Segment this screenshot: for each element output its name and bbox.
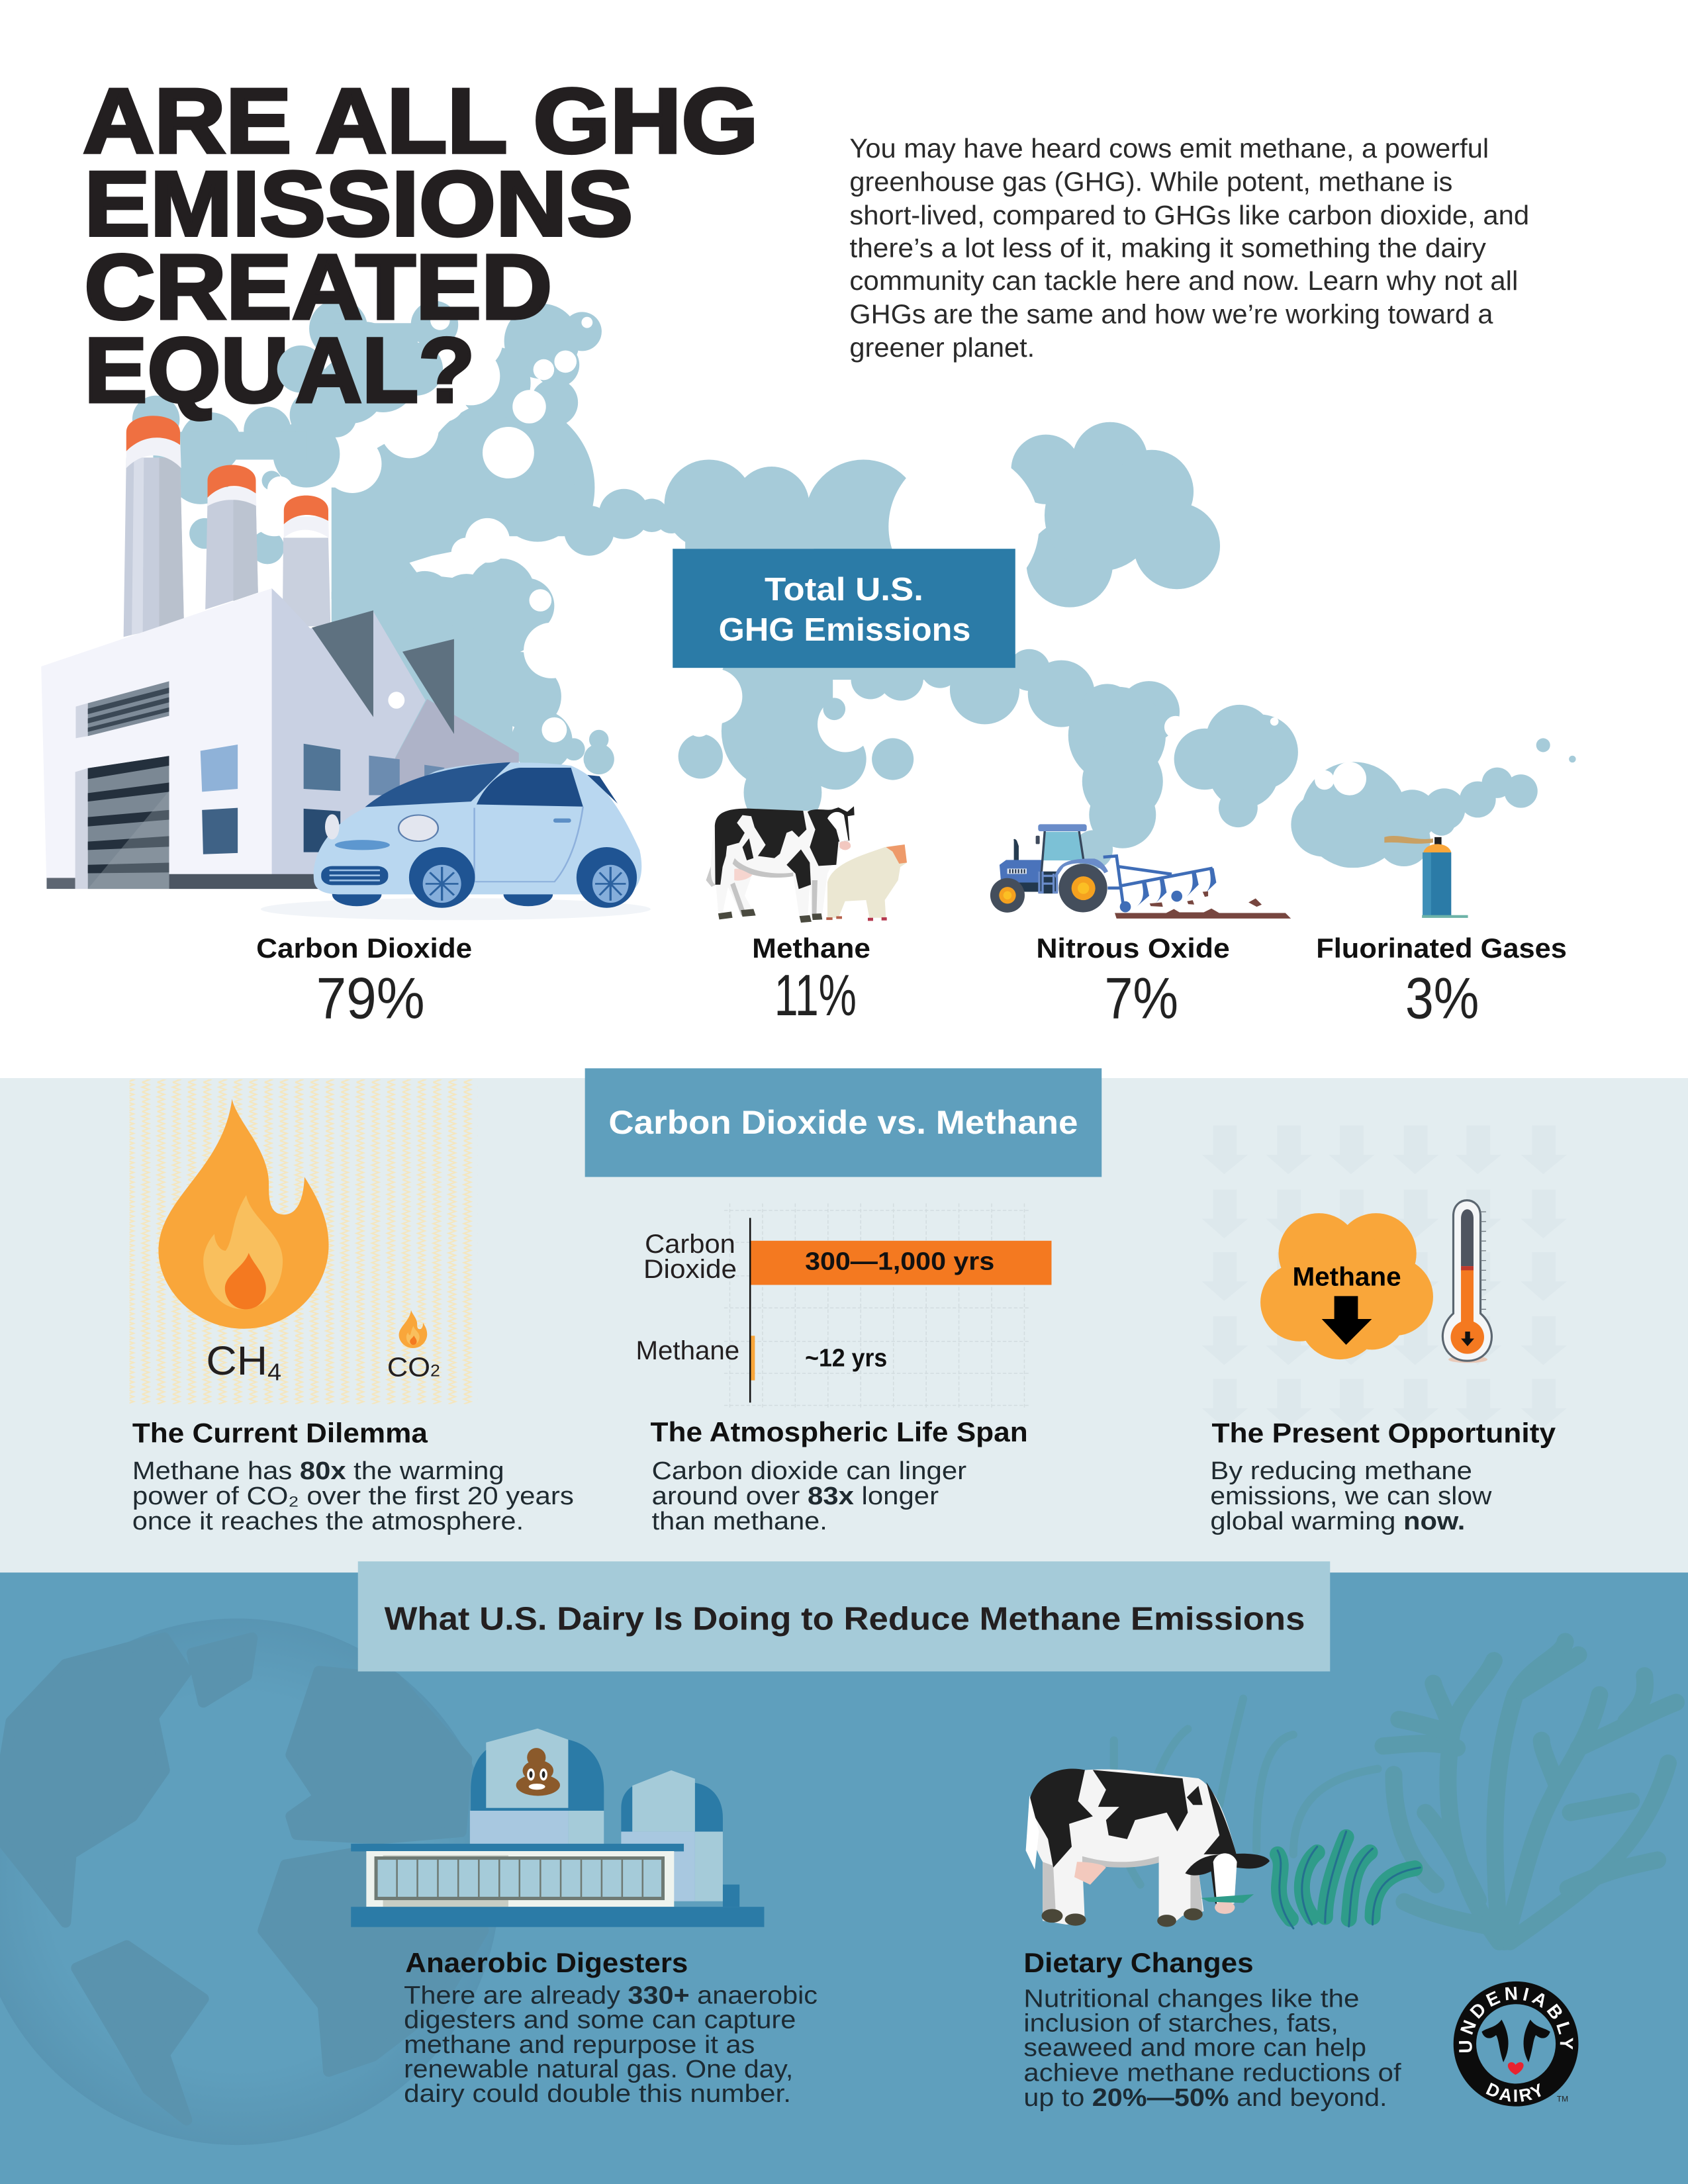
- intro paragraph: short-lived, compared to GHGs like carbon dioxide, and: [849, 200, 1529, 230]
- title: EQU: [84, 319, 289, 422]
- heading: what U.S. dairy is doing: [358, 1561, 1330, 1672]
- text block: anaerobic digesters: renewable natural gas. One day,: [404, 2056, 793, 2083]
- chart category labels: Carbon: [645, 1230, 735, 1259]
- icon: small flame: [399, 1310, 427, 1348]
- chart value labels: ~12 yrs: [805, 1345, 887, 1373]
- text block: the present opportunity: [1210, 1417, 1556, 1535]
- text block: atmospheric life span: [651, 1416, 1028, 1535]
- text block: the present opportunity: The Present Opportunity: [1211, 1417, 1556, 1448]
- barn building: [351, 1844, 764, 1927]
- cloud cut-outs: factory smoke: [323, 281, 592, 772]
- text block: dietary changes: [1023, 1947, 1401, 2112]
- intro paragraph: community can tackle here and now. Learn why not all: [849, 265, 1518, 296]
- bar chart: atmospheric life span: [635, 1203, 1051, 1410]
- text block: the current dilemma: The Current Dilemma: [132, 1417, 428, 1448]
- illustration: car: [261, 762, 651, 920]
- illustration: cow and sheep: [706, 806, 907, 923]
- factory windows: [201, 744, 445, 854]
- title: AL?: [295, 319, 475, 422]
- heading: total emissions box: [673, 549, 1015, 668]
- text block: the present opportunity: global warming now.: [1210, 1508, 1465, 1535]
- icon: poop emoji: [516, 1748, 560, 1796]
- text block: the current dilemma: Methane has 80x the warming: [132, 1457, 504, 1485]
- background illustration: globe: [0, 1619, 500, 2145]
- stat: fluorinated gases: Fluorinated Gases: [1316, 933, 1567, 964]
- smoke cloud: methane and nitrous oxide: [635, 422, 1298, 869]
- text block: atmospheric life span: The Atmospheric Life Span: [651, 1416, 1028, 1447]
- text block: atmospheric life span: than methane.: [652, 1508, 827, 1535]
- intro paragraph: [849, 133, 1529, 363]
- stat: carbon dioxide: 79%: [316, 965, 425, 1030]
- text block: dietary changes: Dietary Changes: [1023, 1947, 1254, 1978]
- label: CO2: CO: [387, 1351, 428, 1382]
- title: CREATED: [84, 236, 552, 338]
- heading: total emissions box: Total U.S.: [765, 571, 923, 608]
- stat: fluorinated gases: [1316, 933, 1567, 1030]
- text block: anaerobic digesters: dairy could double this number.: [404, 2080, 791, 2108]
- icon: methane cloud with down arrow: Methane: [1292, 1263, 1401, 1292]
- bar: carbon dioxide: [751, 1241, 1051, 1285]
- text block: the present opportunity: By reducing methane: [1210, 1457, 1472, 1485]
- intro paragraph: there’s a lot less of it, making it something the dairy: [849, 232, 1486, 263]
- icon: large flame: [158, 1099, 329, 1329]
- smoke cloud: fluorinated gases: [1291, 738, 1576, 868]
- logo: undeniably dairy: TM: [1557, 2095, 1568, 2104]
- chart value labels: [805, 1248, 994, 1373]
- panel: dairy actions section background: [0, 1572, 1688, 2184]
- stat: nitrous oxide: [1036, 933, 1230, 1030]
- label: CH4: CH: [206, 1338, 265, 1383]
- intro paragraph: greener planet.: [849, 332, 1035, 363]
- stat: nitrous oxide: Nitrous Oxide: [1036, 933, 1230, 964]
- chimney 3: [283, 496, 330, 626]
- text block: dietary changes: seaweed and more can help: [1023, 2034, 1366, 2062]
- text block: dietary changes: up to 20%—50% and beyond.: [1023, 2084, 1387, 2112]
- illustration: green seaweed: [1278, 1831, 1420, 1929]
- heading: carbon dioxide vs methane: [585, 1068, 1102, 1177]
- icon: methane cloud with down arrow: [1260, 1213, 1433, 1359]
- text block: atmospheric life span: around over 83x longer: [652, 1482, 939, 1510]
- label: CO2: 2: [430, 1361, 440, 1380]
- text block: anaerobic digesters: [404, 1947, 818, 2108]
- text block: anaerobic digesters: There are already 330+ anaerobic: [404, 1981, 818, 2009]
- chimney 2: [205, 465, 258, 610]
- text block: anaerobic digesters: Anaerobic Digesters: [405, 1947, 688, 1978]
- logo: undeniably dairy: UNDENIABLY: [1459, 1987, 1573, 2052]
- illustration: spray can: [1384, 836, 1468, 918]
- stat: carbon dioxide: [256, 933, 472, 1030]
- stat: fluorinated gases: 3%: [1405, 965, 1479, 1030]
- label: CH4: 4: [267, 1359, 281, 1386]
- chart category labels: Dioxide: [643, 1255, 737, 1284]
- heading: what U.S. dairy is doing: What U.S. Dairy Is Doing to Reduce Methane Emissions: [385, 1600, 1305, 1637]
- icon: thermometer: [1442, 1201, 1491, 1363]
- illustration: factory: [41, 416, 519, 889]
- panel: comparison section background: [0, 1078, 1688, 1572]
- chart axis: [749, 1218, 751, 1402]
- factory louvers and door: [75, 681, 169, 889]
- intro paragraph: GHGs are the same and how we’re working toward a: [849, 298, 1493, 329]
- stat: nitrous oxide: 7%: [1104, 965, 1178, 1030]
- stat: methane: Methane: [752, 933, 870, 964]
- stat: methane: [752, 933, 870, 1028]
- chart category labels: Methane: [635, 1336, 739, 1365]
- heading: carbon dioxide vs methane: Carbon Dioxide vs. Methane: [608, 1103, 1078, 1141]
- panel: current dilemma illustration: [130, 1079, 478, 1404]
- intro paragraph: greenhouse gas (GHG). While potent, methane is: [849, 166, 1452, 197]
- text block: dietary changes: Nutritional changes like the: [1023, 1985, 1359, 2013]
- intro paragraph: You may have heard cows emit methane, a powerful: [849, 133, 1489, 163]
- stat: methane: 11%: [774, 962, 857, 1028]
- bar: methane: [751, 1336, 755, 1381]
- text block: atmospheric life span: Carbon dioxide can linger: [652, 1457, 966, 1485]
- factory roof vents: [312, 610, 454, 734]
- factory walls: [41, 588, 519, 889]
- title: ARE ALL GHG: [83, 69, 759, 172]
- digester dome 2: [621, 1770, 723, 1901]
- heading: total emissions box: GHG Emissions: [719, 612, 970, 648]
- text block: the present opportunity: emissions, we can slow: [1210, 1482, 1492, 1510]
- smoke cloud: factory and car: [332, 304, 669, 774]
- title: [83, 69, 759, 422]
- text block: the current dilemma: power of CO₂ over the first 20 years: [132, 1482, 574, 1510]
- text block: the current dilemma: once it reaches the atmosphere.: [132, 1508, 524, 1535]
- illustration: grazing cow: [1026, 1769, 1270, 1927]
- cover: open white gap below the big cloud: [410, 536, 669, 655]
- smoke cloud: upper left behind title: [132, 299, 458, 564]
- title: EMISSIONS: [84, 153, 633, 255]
- text block: dietary changes: inclusion of starches, fats,: [1023, 2010, 1338, 2038]
- chart category labels: [635, 1230, 739, 1365]
- text block: dietary changes: achieve methane reductions of: [1023, 2059, 1401, 2087]
- text block: anaerobic digesters: digesters and some can capture: [404, 2006, 796, 2034]
- digester dome 1: [470, 1729, 604, 1844]
- text block: the current dilemma: [132, 1417, 574, 1535]
- background illustration: seaweed: [1114, 1641, 1676, 1942]
- text block: anaerobic digesters: methane and repurpose it as: [404, 2031, 755, 2059]
- chimney 1: [124, 416, 184, 637]
- chart value labels: 300—1,000 yrs: [805, 1248, 994, 1275]
- logo: undeniably dairy: DAIRY: [1485, 2082, 1541, 2102]
- stat: carbon dioxide: Carbon Dioxide: [256, 933, 472, 964]
- logo: undeniably dairy: [1454, 1981, 1578, 2107]
- background pattern: down arrows: [1202, 1126, 1567, 1428]
- illustration: tractor with plough: [990, 824, 1291, 919]
- illustration: anaerobic digester: [351, 1729, 764, 1927]
